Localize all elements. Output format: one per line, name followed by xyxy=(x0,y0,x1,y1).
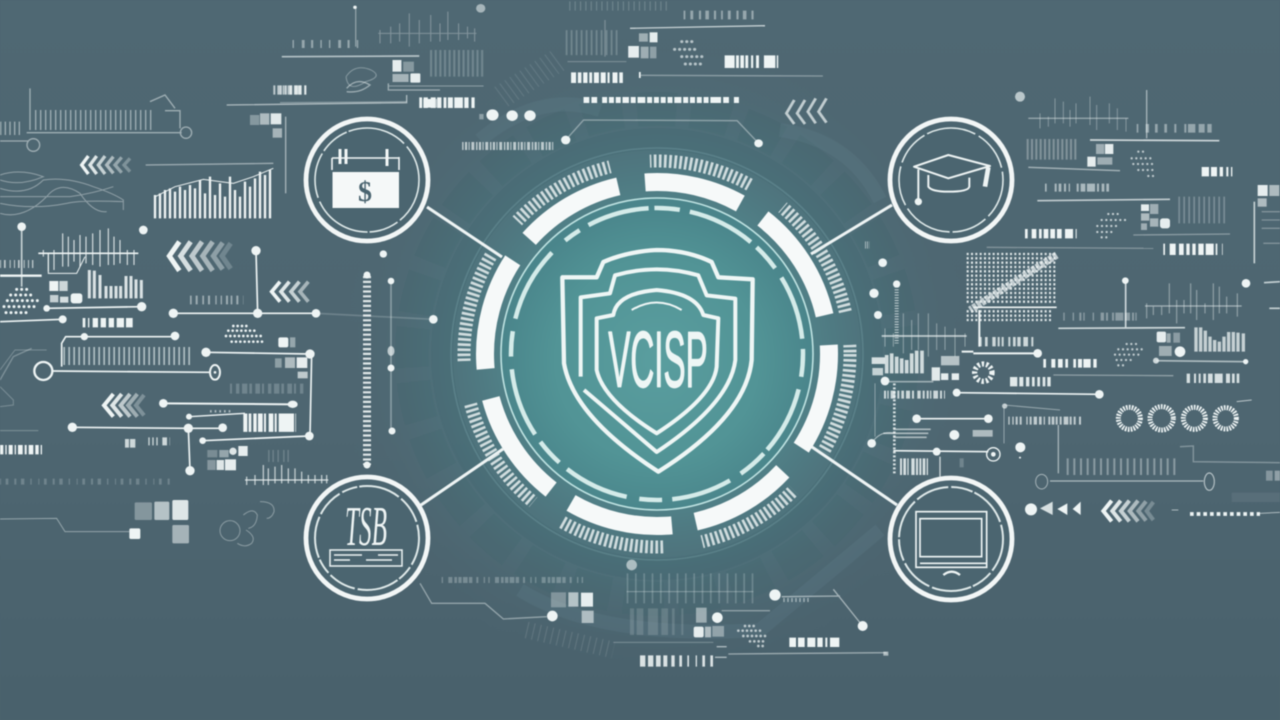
arrows row xyxy=(1025,502,1081,515)
marks row xyxy=(1043,350,1097,376)
link dots xyxy=(0,222,148,323)
marks with frame xyxy=(1002,403,1083,443)
squiggle row xyxy=(462,134,555,158)
block row xyxy=(584,91,741,109)
marks xyxy=(1037,172,1237,201)
panel: bottom data cluster xyxy=(420,560,888,661)
top link line with squares xyxy=(227,82,440,193)
white dots xyxy=(486,109,763,147)
vertical ladder column xyxy=(364,272,396,468)
squares with connector xyxy=(201,337,315,378)
faint blocks xyxy=(230,374,303,404)
icon: calendar with dollar xyxy=(306,119,428,241)
bar block and squares xyxy=(1153,327,1248,364)
bars and squares xyxy=(1027,144,1120,171)
dot ring xyxy=(1097,214,1127,237)
bar block xyxy=(89,270,141,298)
link with marks xyxy=(962,342,1042,358)
ladder with links xyxy=(867,383,1025,477)
signal with ladder xyxy=(869,258,967,357)
segmented white ring xyxy=(476,173,838,535)
chevrons xyxy=(1103,501,1153,521)
squares stack xyxy=(1141,204,1170,230)
central glow and faint gear xyxy=(337,34,977,674)
icon: graduation cap xyxy=(890,119,1012,241)
big chevrons xyxy=(169,242,231,271)
faint charts xyxy=(527,588,753,650)
squares xyxy=(392,4,485,119)
small marks xyxy=(190,287,243,313)
dot cluster xyxy=(4,289,42,313)
signal chart xyxy=(0,228,138,276)
mid link with signal xyxy=(1058,277,1280,328)
connector lines xyxy=(421,205,897,505)
large squares with link xyxy=(0,500,189,543)
marks row xyxy=(83,309,135,337)
ring line xyxy=(0,348,220,380)
shield icon: VCISP xyxy=(608,316,708,404)
top dot and faint text row xyxy=(442,560,637,580)
bar cluster xyxy=(872,351,959,381)
shield icon xyxy=(562,250,753,472)
trapezoid link xyxy=(566,120,759,143)
dotted tail xyxy=(1172,510,1280,514)
icon: computer monitor xyxy=(890,478,1012,600)
left chart group xyxy=(280,6,484,103)
square group right xyxy=(694,608,770,637)
line above bar chart xyxy=(146,163,273,165)
top signal xyxy=(1015,90,1219,141)
panel: top data cluster xyxy=(280,4,826,147)
signal row xyxy=(245,456,328,485)
right side squares xyxy=(1254,185,1280,263)
second dot cluster xyxy=(226,326,263,342)
outer tick ring xyxy=(464,161,850,547)
squares xyxy=(207,446,248,470)
central tree line xyxy=(169,246,438,324)
chevrons xyxy=(82,156,130,174)
chevrons xyxy=(104,394,144,417)
right link xyxy=(769,589,868,631)
icon: calendar with dollar: $ xyxy=(358,177,372,208)
third dot ring xyxy=(1115,344,1143,365)
faint circles xyxy=(220,502,274,546)
panel: right lower data cluster xyxy=(867,351,1280,521)
lower chart xyxy=(1036,400,1280,502)
connector lines with dots xyxy=(68,399,298,475)
small chevrons xyxy=(272,282,308,302)
chevron patch xyxy=(786,98,826,124)
dot ring cluster xyxy=(1132,152,1155,176)
inner dashed ring xyxy=(506,203,808,505)
panel: right upper data cluster xyxy=(865,90,1280,365)
icon: labelled TSB plate xyxy=(306,477,428,599)
panel: left lower data cluster xyxy=(0,350,328,546)
marks xyxy=(0,350,173,482)
gear dot ring xyxy=(975,364,992,381)
frame line xyxy=(199,354,314,444)
rising bar chart xyxy=(153,168,273,218)
white marks with lines xyxy=(987,234,1230,249)
teal disc xyxy=(501,198,813,510)
faint bars xyxy=(1178,170,1228,250)
central hub xyxy=(464,161,850,547)
icon: labelled TSB plate: TSB xyxy=(345,496,387,558)
panel: left upper data cluster xyxy=(0,82,440,380)
squares with elbow link xyxy=(420,583,594,623)
dot matrix with diagonal xyxy=(967,254,1057,347)
dashed rings xyxy=(1118,407,1236,430)
marks and lines xyxy=(881,375,1240,399)
squares block xyxy=(49,281,82,303)
bracket bars xyxy=(62,332,193,367)
dot cluster xyxy=(738,626,768,646)
bright marks xyxy=(640,642,888,661)
bright marks xyxy=(571,62,823,78)
wave tangle xyxy=(0,172,123,215)
small scatter marks xyxy=(865,234,869,256)
white bar block xyxy=(243,395,296,450)
right chart group xyxy=(501,6,765,97)
faint timeline xyxy=(0,88,192,151)
